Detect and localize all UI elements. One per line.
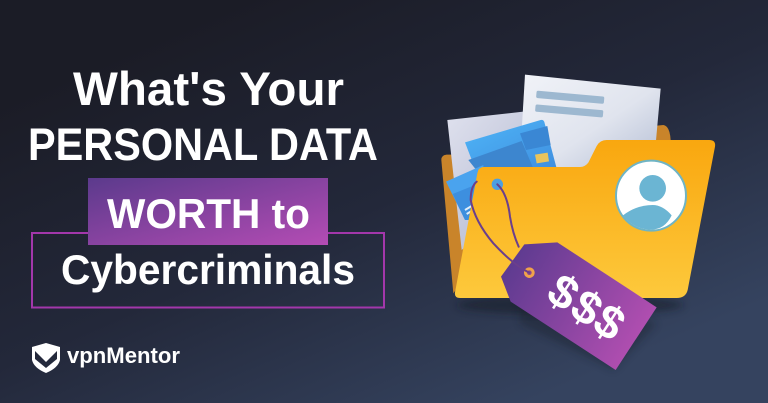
title: Cybercriminals: Cybercriminals: [61, 246, 355, 293]
credit card back: [465, 120, 557, 168]
outlined box: Cybercriminals: [32, 233, 384, 308]
title: WORTH to: WORTH to: [107, 190, 310, 237]
logo text: vpnMentor: [67, 343, 180, 368]
folder back right: [653, 125, 671, 141]
credit card front: [446, 165, 483, 220]
shadow: [457, 295, 683, 315]
price tag: $: [562, 279, 612, 337]
user badge: [616, 161, 686, 231]
title: PERSONAL DATA: PERSONAL DATA: [28, 119, 378, 170]
illustration: folder with price tag: [441, 75, 715, 370]
icon: shield logo: [32, 343, 60, 373]
document lines: [535, 91, 604, 118]
logo: vpnMentor: [32, 343, 180, 373]
document front: [519, 75, 661, 170]
tag shadow: [520, 270, 657, 370]
price tag: $: [585, 293, 635, 351]
highlight box: WORTH to: [88, 178, 328, 245]
folder back left: [441, 155, 470, 293]
tag hole: [524, 267, 535, 278]
document back: [447, 112, 560, 250]
dollar signs: $: [539, 263, 589, 321]
title: What's Your: What's Your: [73, 62, 344, 115]
tag body: [501, 242, 657, 370]
folder front: [455, 140, 715, 298]
price tag: [471, 182, 657, 370]
eyelet: [492, 179, 503, 190]
tag string: [471, 182, 529, 273]
